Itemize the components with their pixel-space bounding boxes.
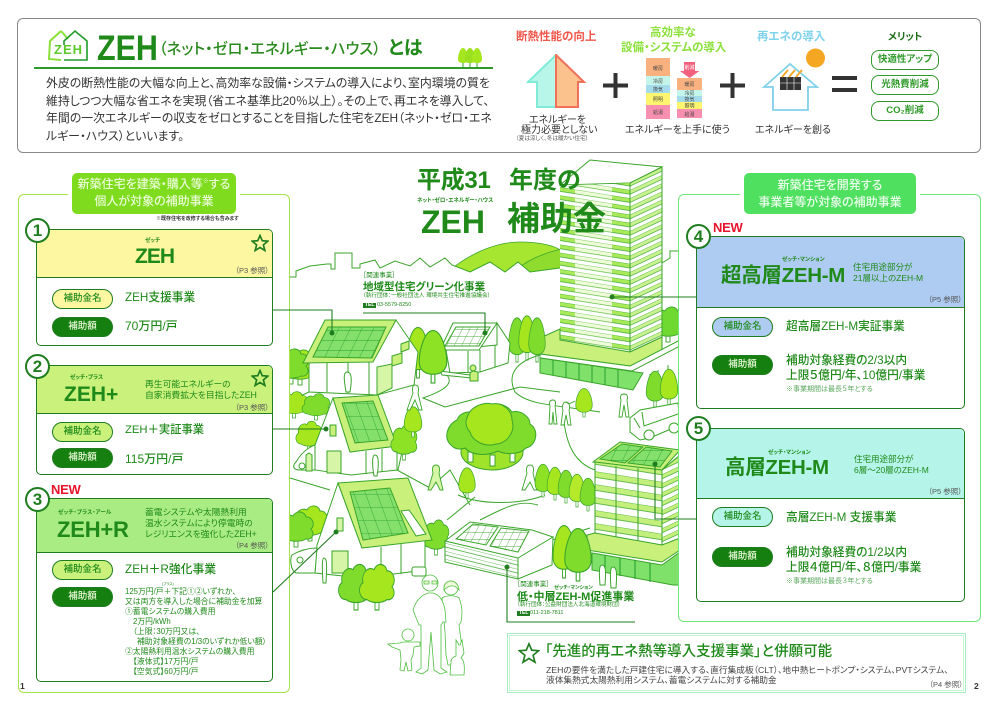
label: green housing project: （執行団体：一般社団法人 環境共生住宅推進協議会）: [363, 293, 490, 299]
label: green housing project: 03-5579-8250: [377, 302, 411, 308]
merit list: CO₂削減: [886, 105, 924, 116]
card 4 header: [697, 237, 964, 308]
diagram: efficient equipment: 給湯: [653, 109, 663, 116]
card 4 header: 超高層ZEH-M: [721, 264, 845, 287]
house 3: [280, 392, 422, 476]
card 1 name pill: 補助金名: [63, 293, 102, 304]
card 1 header: （P3 参照）: [235, 266, 269, 275]
main title: 年度の: [509, 167, 581, 194]
card 4 name pill: [712, 317, 773, 337]
text block: ZEH description: 外皮の断熱性能の大幅な向上と、高効率な設備・システムの導入により、室内環境の質を: [46, 76, 490, 90]
diagram: renewable energy: [755, 30, 831, 136]
diagram: efficient equipment: エネルギーを上手に使う: [625, 125, 730, 136]
icon: star: [518, 642, 540, 664]
card 5 name pill: 補助金名: [723, 511, 762, 522]
label: green housing project: ［関連事業］: [363, 272, 396, 279]
merit list: メリット: [888, 32, 922, 43]
badge 5: 5: [694, 419, 703, 438]
card 2 header: [37, 366, 272, 414]
card 2 name pill: [52, 422, 113, 442]
label: green housing project: TEL: [365, 302, 374, 308]
card 3 header: [37, 499, 272, 553]
card 2 amount pill: [52, 448, 113, 468]
card 1 amount pill: 補助額: [68, 321, 97, 332]
card 4 header: ゼッチ・マンション: [782, 257, 825, 263]
card 3 amount detail: 125万円/戸＋下記①②いずれか、: [125, 587, 236, 596]
hills and skyline: [290, 242, 680, 290]
diagram: efficient equipment: 冷房: [653, 78, 663, 85]
diagram: efficient equipment: 削減: [684, 64, 695, 71]
card 1: ZEH: [36, 229, 273, 346]
card 3 amount detail: 補助対象経費の1/3のいずれか低い額）: [137, 637, 266, 646]
merit list: 快適性アップ: [878, 54, 932, 65]
badge 3: 3: [33, 490, 42, 509]
label: low/mid-rise project: ゼッチ・マンション: [554, 585, 593, 591]
new tag 3: NEW: [51, 482, 80, 497]
card 3 amount detail: 2万円/kWh: [133, 617, 171, 626]
new tag 4: NEW: [713, 220, 742, 235]
card 3 amount detail: ①蓄電システムの購入費用: [125, 607, 215, 616]
house 4: [279, 478, 449, 610]
diagram: renewable energy: エネルギーを創る: [755, 125, 831, 136]
text block: ZEH description: 維持しつつ大幅な省エネを実現（省エネ基準比20％以上）。その上で、再エネを導入して、: [46, 94, 489, 108]
panel heading: individuals: 新築住宅を建築・購入等※する: [78, 177, 230, 191]
card 2 header: 再生可能エネルギーの 自家消費拡大を目指したZEH: [145, 379, 257, 400]
icon: ZEH house logo: ZEH: [54, 42, 82, 57]
card 3 amount detail: (プラス): [162, 582, 174, 586]
card 3 amount detail: （上限：30万円又は、: [133, 627, 200, 636]
footnote: ※既存住宅を改修する場合も含みます: [156, 216, 239, 222]
text block: ZEH description: 年間の一次エネルギーの収支をゼロとすることを目指した住宅をZEH（ネット・ゼロ・エネ: [46, 111, 492, 125]
card 3 header: 蓄電システムや太陽熱利用 温水システムにより停電時の レジリエンスを強化したZEH+: [145, 507, 257, 539]
callout body: [546, 665, 949, 685]
diagram: insulation: エネルギーを: [529, 115, 586, 126]
badge 3: [25, 487, 50, 512]
label: green housing project: 地域型住宅グリーン化事業: [363, 281, 485, 293]
card 5 amount value: 補助対象経費の1/2以内: [786, 546, 907, 559]
callout page reference: （P4 参照）: [929, 680, 963, 689]
card 2 name value: ZEH＋実証事業: [125, 424, 204, 436]
family: [388, 575, 464, 675]
row of trees: [535, 464, 596, 511]
main title: ZEH: [421, 204, 485, 240]
merit list: [871, 32, 939, 121]
people on the path: [407, 385, 629, 490]
callout body: 液体集熱式太陽熱利用システム、蓄電システムに対する補助金: [546, 675, 777, 685]
diagram: insulation: [516, 30, 598, 142]
label: low/mid-rise project: TEL: [519, 610, 528, 616]
card 3 header: ZEH+R: [57, 517, 129, 542]
main title: [417, 167, 606, 240]
card 1 amount pill: [52, 317, 113, 337]
card 2 amount value: 115万円/戸: [125, 452, 183, 466]
card 4: super high-rise ZEH-M: ※事業期間は最長５年とする: [786, 386, 873, 393]
main title: ネット・ゼロ・エネルギー・ハウス: [417, 198, 493, 204]
icon: plus: [603, 73, 628, 98]
diagram: efficient equipment: [621, 26, 730, 136]
card 3: ZEH+R: [36, 498, 273, 682]
card 5 amount pill: [712, 547, 773, 567]
diagram: efficient equipment: 冷房: [684, 90, 695, 97]
card 1 name pill: [52, 289, 113, 309]
panel heading: businesses: 事業者等が対象の補助事業: [758, 195, 902, 209]
badge 1: 1: [33, 221, 42, 240]
card 3 amount pill: 補助額: [68, 591, 97, 602]
page number 2: 2: [974, 681, 979, 691]
card 5: high-rise ZEH-M: 上限４億円/年、８億円/事業: [786, 561, 921, 574]
diagram: renewable energy: 再エネの導入: [757, 31, 825, 43]
house 1: [303, 320, 418, 395]
card 3 amount detail: ②太陽熱利用温水システムの購入費用: [125, 647, 254, 656]
card 4 name value: 超高層ZEH-M実証事業: [786, 320, 905, 333]
title: ZEH とは: （ネット・ゼロ・エネルギー・ハウス）: [159, 41, 381, 58]
card 3 header: ゼッチ・プラス・アール: [58, 510, 112, 516]
icon: trees: [458, 48, 482, 67]
card 4: super high-rise ZEH-M: [696, 236, 965, 409]
card 1 header: ゼッチ: [145, 238, 160, 244]
central round trees: [447, 404, 536, 498]
panel: what is ZEH: [17, 18, 981, 153]
card 5: high-rise ZEH-M: ※事業期間は最長３年とする: [786, 578, 873, 585]
card 5 name value: 高層ZEH-M 支援事業: [786, 511, 896, 524]
card 4: super high-rise ZEH-M: 上限５億円/年、10億円/事業: [786, 369, 925, 382]
card 2 amount pill: 補助額: [68, 452, 97, 463]
icon: ZEH house logo: [48, 30, 88, 61]
card 4 header: （P5 参照）: [928, 295, 962, 304]
text block: ZEH description: [46, 76, 492, 143]
diagram: efficient equipment: 暖房: [684, 81, 695, 88]
card 4 amount value: 補助対象経費の2/3以内: [786, 354, 907, 367]
card 5 header: （P5 参照）: [928, 487, 962, 496]
diagram: insulation: 極力必要としない: [521, 125, 598, 136]
diagram: efficient equipment: 照明: [653, 97, 663, 103]
title: ZEH とは: [97, 29, 423, 68]
card 2 header: ゼッチ・プラス: [70, 375, 103, 381]
card 4 amount pill: 補助額: [728, 359, 757, 370]
badge 2: 2: [33, 357, 42, 376]
label: low/mid-rise project: （執行団体：公益財団法人北海道環境財団）: [517, 602, 620, 608]
label: low/mid-rise project: [517, 580, 634, 616]
card 3 amount detail: 【液体式】17万円/戸: [133, 657, 198, 666]
divider line under title: [34, 67, 493, 68]
label: low/mid-rise project: 011-218-7811: [530, 610, 563, 616]
card 1 header: [37, 230, 272, 278]
main title: 補助金: [507, 200, 606, 237]
paths: [290, 355, 600, 540]
card 2: ZEH+: [36, 365, 273, 475]
panel heading: businesses: [740, 173, 920, 214]
panel: individuals frame: [18, 194, 290, 693]
badge 4: [686, 224, 711, 249]
panel heading: individuals: 個人が対象の補助事業: [94, 194, 214, 208]
panel heading: businesses: 新築住宅を開発する: [778, 178, 882, 192]
diagram: efficient equipment: 照明: [684, 104, 695, 110]
page number 1: 1: [20, 681, 25, 691]
card 3 name value: ZEH＋R強化事業: [125, 562, 216, 576]
badge 5: [686, 416, 711, 441]
card 1 amount value: 70万円/戸: [125, 319, 178, 333]
mid-rise building: [553, 442, 680, 588]
diagram: efficient equipment: 換気: [684, 96, 695, 103]
card 2 header: （P3 参照）: [235, 403, 269, 412]
badge 4: 4: [694, 227, 703, 246]
diagram: efficient equipment: 高効率な: [650, 27, 696, 39]
card 4 name pill: 補助金名: [723, 321, 762, 332]
card 5 amount pill: 補助額: [728, 551, 757, 562]
card 5 header: [697, 429, 964, 499]
card 3 header: （P4 参照）: [235, 541, 269, 550]
card 3 name pill: 補助金名: [63, 564, 102, 575]
card 4 amount pill: [712, 355, 773, 375]
label: low/mid-rise project: 低・中層ZEH-M促進事業: [517, 591, 634, 603]
label: low/mid-rise project: ［関連事業］: [517, 581, 550, 588]
panel: businesses frame: [678, 194, 981, 622]
callout: combinable subsidy: [507, 633, 966, 693]
card 3 amount detail: [125, 582, 266, 676]
callout heading: 「先進的再エネ熱等導入支援事業」と併願可能: [545, 644, 832, 660]
diagram: efficient equipment: 設備・システムの導入: [621, 42, 726, 54]
badge 2: [25, 354, 50, 379]
diagram: efficient equipment: 換気: [653, 86, 663, 93]
trees background row: [274, 316, 545, 385]
callout body: ZEHの要件を満たした戸建住宅に導入する、直行集成板（CLT）、地中熱ヒートポンプ・システム、PVTシステム、: [546, 665, 949, 675]
house 2: [419, 323, 510, 383]
title: ZEH とは: とは: [388, 38, 423, 59]
card 4 header: 住宅用途部分が 21層以上のZEH-M: [853, 262, 923, 283]
diagram: efficient equipment: 給湯: [684, 111, 695, 118]
van: [630, 369, 680, 440]
card 3 amount detail: 【空気式】60万円/戸: [133, 667, 198, 676]
merit list: 光熱費削減: [881, 79, 929, 90]
badge 1: [25, 218, 50, 243]
card 3 name pill: [52, 560, 113, 580]
card 3 amount detail: 又は両方を導入した場合に補助金を加算: [125, 597, 262, 606]
panel heading: individuals: [68, 173, 240, 214]
tower: [540, 160, 685, 392]
card 1 header: ZEH: [135, 245, 174, 268]
card 5: high-rise ZEH-M: [696, 428, 965, 602]
card 2 name pill: 補助金名: [63, 426, 102, 437]
text block: ZEH description: ルギー・ハウス）といいます。: [46, 129, 184, 143]
icon: plus: [720, 73, 745, 98]
card 2 header: ZEH+: [64, 383, 118, 406]
card 5 name pill: [712, 507, 773, 527]
icon: equals: [832, 76, 857, 92]
card 3 amount pill: [52, 587, 113, 607]
diagram: insulation: （夏は涼しく、冬は暖かい住宅）: [516, 136, 588, 142]
diagram: efficient equipment: 暖房: [653, 65, 663, 72]
card 1 name value: ZEH支援事業: [125, 291, 195, 304]
main title: 平成31: [417, 167, 490, 194]
card 5 header: 高層ZEH-M: [725, 456, 829, 479]
diagram: insulation: 断熱性能の向上: [516, 31, 596, 43]
card 5 header: 住宅用途部分が 6層～20層のZEH-M: [854, 454, 929, 475]
label: green housing project: [363, 272, 490, 308]
card 5 header: ゼッチ・マンション: [768, 450, 811, 456]
title: ZEH とは: ZEH: [97, 29, 158, 68]
low-rise building: [445, 522, 553, 579]
